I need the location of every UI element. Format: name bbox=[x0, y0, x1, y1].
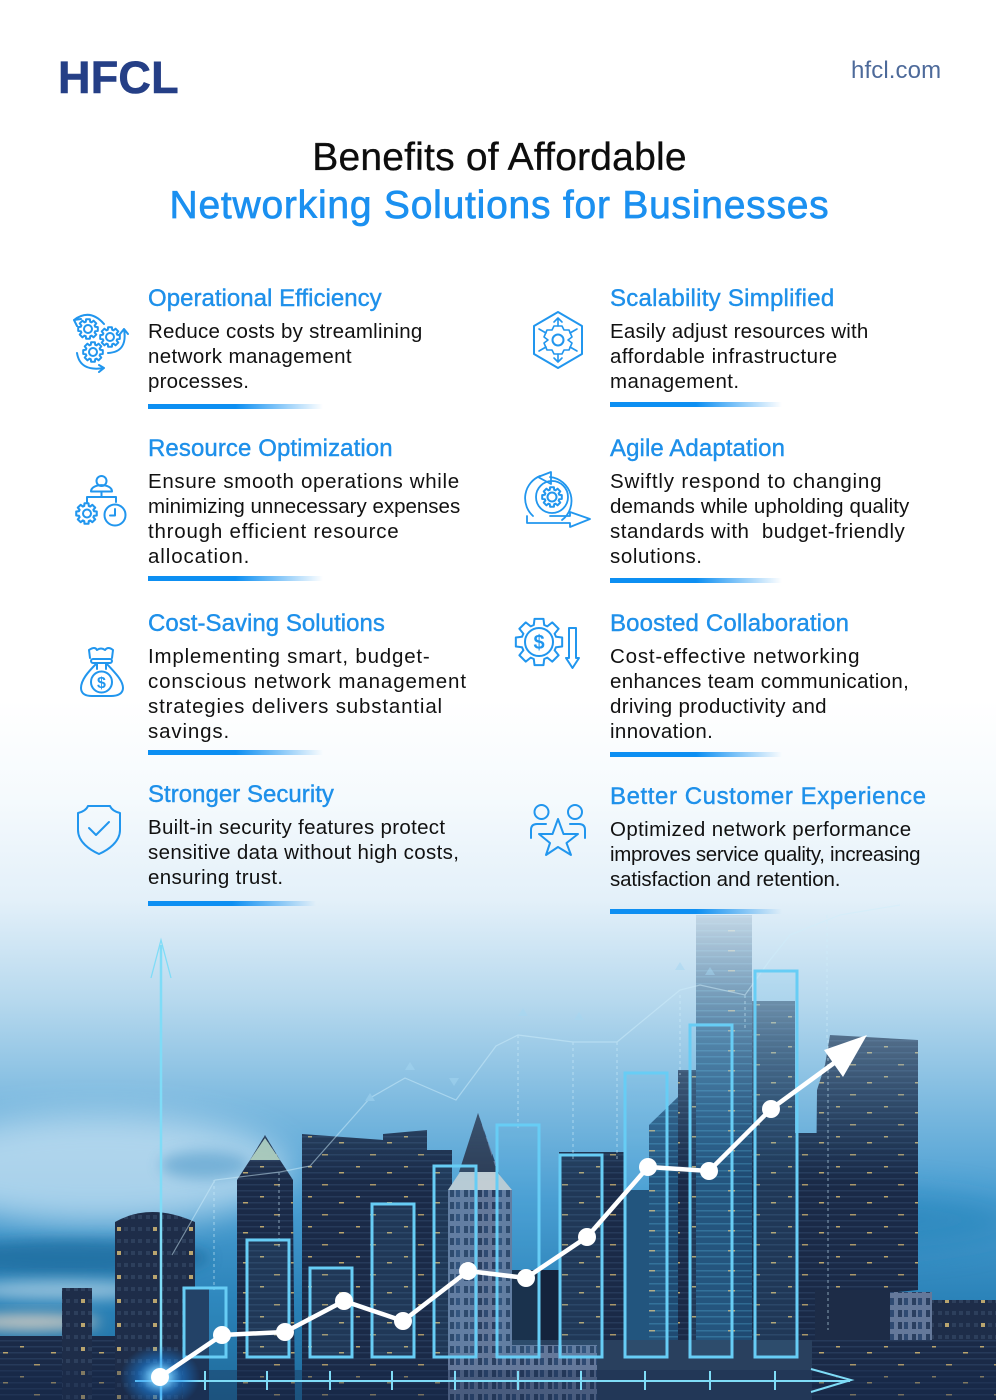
icon: hexagon gear bbox=[533, 311, 583, 369]
body text: conscious network management bbox=[148, 670, 467, 693]
body text: minimizing unnecessary expenses bbox=[148, 495, 460, 518]
website link: hfcl.com bbox=[851, 57, 941, 84]
body text: through efficient resource bbox=[148, 520, 400, 543]
heading: Boosted Collaboration bbox=[610, 610, 849, 637]
body text: management. bbox=[610, 370, 739, 393]
heading: Agile Adaptation bbox=[610, 435, 785, 462]
icon: person, gear and clock bbox=[75, 475, 126, 526]
body text bbox=[148, 816, 459, 889]
panel: Cost-Saving Solutions bbox=[148, 610, 467, 755]
body text: savings. bbox=[148, 720, 230, 743]
body text: ensuring trust. bbox=[148, 866, 283, 889]
body text bbox=[148, 320, 422, 393]
panel: Agile Adaptation bbox=[610, 435, 910, 583]
body text: innovation. bbox=[610, 720, 713, 743]
body text: Implementing smart, budget- bbox=[148, 645, 431, 668]
icon: gear with dollar and down arrow bbox=[514, 618, 580, 669]
logo: HFCL: HFCL bbox=[58, 52, 179, 103]
origin glow bbox=[120, 1345, 200, 1400]
body text bbox=[148, 470, 460, 568]
body text bbox=[148, 645, 467, 743]
body text bbox=[610, 818, 920, 891]
body text: network management bbox=[148, 345, 352, 368]
growth line with arrow bbox=[151, 1035, 867, 1386]
body text: sensitive data without high costs, bbox=[148, 841, 459, 864]
heading: Scalability Simplified bbox=[610, 285, 834, 312]
body text: solutions. bbox=[610, 545, 703, 568]
text: $ bbox=[533, 632, 545, 654]
panel: Resource Optimization bbox=[148, 435, 460, 581]
body text: processes. bbox=[148, 370, 249, 393]
body text: Ensure smooth operations while bbox=[148, 470, 460, 493]
icon: rotating gears bbox=[73, 314, 129, 373]
icon: shield with check bbox=[77, 805, 121, 855]
buildings bbox=[0, 915, 996, 1400]
body text bbox=[610, 320, 869, 393]
panel: Operational Efficiency bbox=[148, 285, 422, 409]
bar chart bbox=[184, 971, 797, 1357]
panel: Stronger Security bbox=[148, 781, 459, 906]
heading: Resource Optimization bbox=[148, 435, 393, 462]
icon: people with star bbox=[530, 804, 586, 856]
clouds bbox=[0, 1115, 996, 1330]
heading: Cost-Saving Solutions bbox=[148, 610, 385, 637]
body text: driving productivity and bbox=[610, 695, 827, 718]
body text: standards with budget-friendly bbox=[610, 520, 905, 543]
panel: Better Customer Experience bbox=[610, 783, 927, 914]
heading: Operational Efficiency bbox=[148, 285, 382, 312]
body text: satisfaction and retention. bbox=[610, 868, 840, 891]
icon: agile cycle bbox=[524, 471, 591, 528]
body text bbox=[610, 645, 909, 743]
title: Benefits of Affordable bbox=[312, 136, 687, 179]
body text: demands while upholding quality bbox=[610, 495, 909, 518]
text: $ bbox=[97, 675, 106, 692]
body text: Built-in security features protect bbox=[148, 816, 445, 839]
body text: Optimized network performance bbox=[610, 818, 912, 841]
body text bbox=[610, 470, 910, 568]
body text: allocation. bbox=[148, 545, 250, 568]
chart axes bbox=[135, 940, 851, 1400]
faint trend line bbox=[172, 905, 900, 1330]
body text: Reduce costs by streamlining bbox=[148, 320, 422, 343]
icon: money bag bbox=[80, 647, 124, 697]
heading: Stronger Security bbox=[148, 781, 334, 808]
body text: enhances team communication, bbox=[610, 670, 909, 693]
body text: Easily adjust resources with bbox=[610, 320, 869, 343]
body text: Swiftly respond to changing bbox=[610, 470, 882, 493]
title: Networking Solutions for Businesses bbox=[170, 184, 829, 227]
body text: strategies delivers substantial bbox=[148, 695, 443, 718]
panel: Scalability Simplified bbox=[610, 285, 869, 407]
body text: Cost-effective networking bbox=[610, 645, 860, 668]
body text: affordable infrastructure bbox=[610, 345, 838, 368]
panel: Boosted Collaboration bbox=[610, 610, 909, 757]
body text: improves service quality, increasing bbox=[610, 843, 920, 866]
heading: Better Customer Experience bbox=[610, 783, 927, 810]
title bbox=[170, 136, 829, 227]
background: city skyline with growth chart bbox=[0, 779, 996, 1400]
